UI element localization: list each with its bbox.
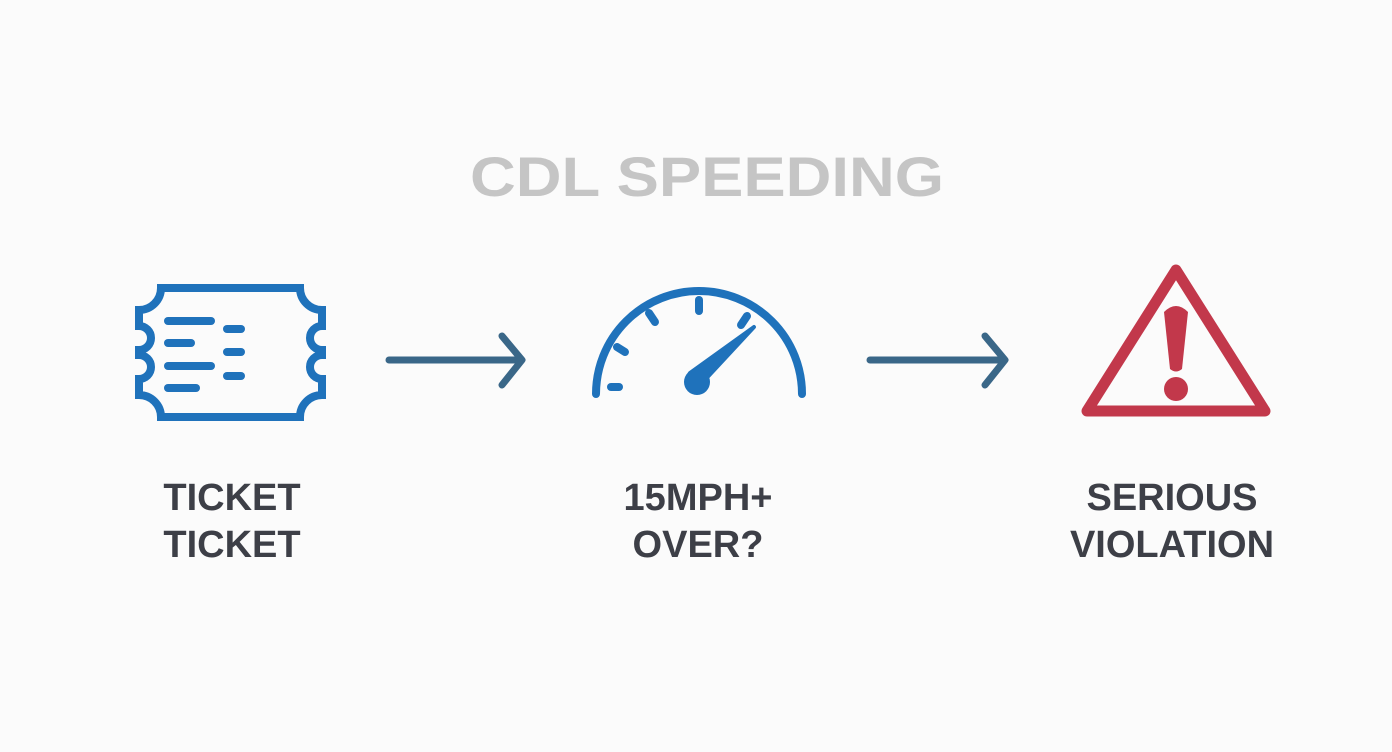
arrow 1 xyxy=(389,336,522,385)
icon: ticket xyxy=(139,288,322,417)
label: speed: OVER? xyxy=(633,524,763,566)
arrow 2 xyxy=(870,336,1005,385)
label: violation: VIOLATION xyxy=(1070,524,1274,566)
label: violation xyxy=(1070,477,1274,566)
label: ticket xyxy=(163,477,301,566)
label: ticket: TICKET xyxy=(163,477,301,519)
label: violation: SERIOUS xyxy=(1086,477,1258,519)
label: speed xyxy=(624,477,772,566)
icon: speedometer xyxy=(596,291,802,395)
title: CDL SPEEDING xyxy=(470,145,944,208)
label: speed: 15MPH+ xyxy=(624,477,772,519)
label: ticket: TICKET xyxy=(163,524,301,566)
icon: warning triangle xyxy=(1087,270,1265,411)
